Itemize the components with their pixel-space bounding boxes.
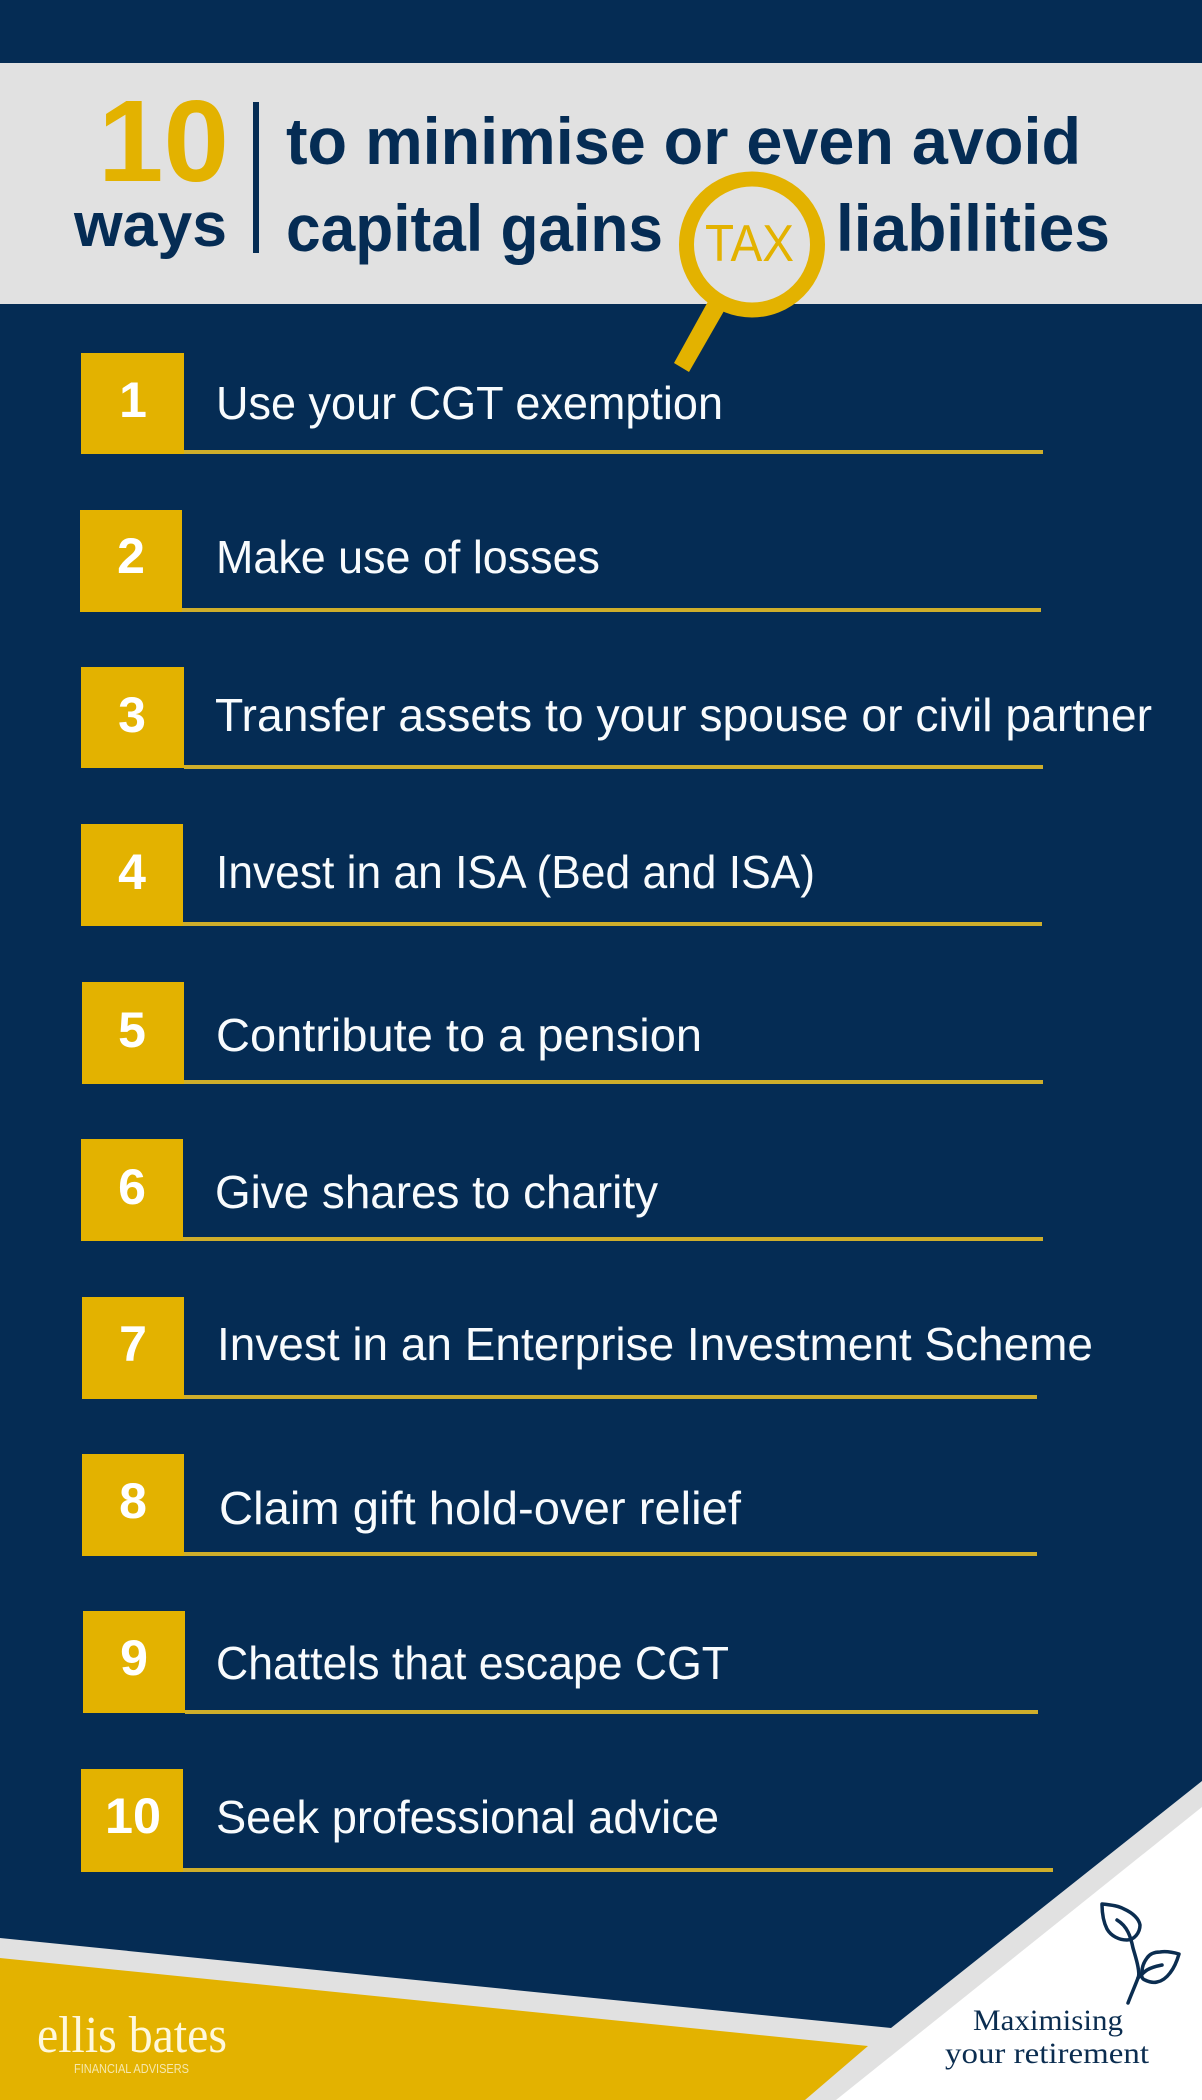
logo: ellis bates: FINANCIAL ADVISERS: [74, 2061, 189, 2076]
icon: magnifying glass over TAX: TAX: [705, 215, 794, 273]
item 1: [81, 353, 1043, 454]
item 7: Invest in an Enterprise Investment Scheme: [217, 1318, 1093, 1370]
icon: magnifying glass over TAX: [674, 179, 818, 372]
item 1: 1: [119, 372, 147, 428]
heading divider: [253, 102, 259, 253]
heading: ways: ways: [73, 191, 227, 260]
item 6: 6: [118, 1159, 146, 1215]
item 2: 2: [117, 528, 145, 584]
heading line two end: liabilities: [836, 191, 1110, 265]
tagline: your retirement: [945, 2037, 1150, 2070]
item 3: Transfer assets to your spouse or civil partner: [215, 689, 1152, 741]
item 8: 8: [119, 1473, 147, 1529]
item 4: 4: [118, 844, 146, 900]
item 9: Chattels that escape CGT: [216, 1637, 729, 1689]
header band: [0, 63, 1202, 304]
item 10: Seek professional advice: [216, 1791, 719, 1843]
item 9: 9: [120, 1630, 148, 1686]
footer shapes: [0, 1781, 1202, 2100]
heading line one: to minimise or even avoid: [286, 104, 1081, 178]
item 2: Make use of losses: [216, 531, 600, 583]
logo: ellis bates: ellis bates: [37, 2007, 227, 2064]
item 10: [81, 1769, 1053, 1872]
item 6: Give shares to charity: [215, 1166, 658, 1218]
item 8: [82, 1454, 1037, 1556]
item 7: [82, 1297, 1093, 1399]
item 5: [82, 982, 1043, 1084]
item 7: 7: [119, 1316, 147, 1372]
item 1: Use your CGT exemption: [216, 377, 723, 429]
item 6: [81, 1139, 1043, 1241]
item 8: Claim gift hold-over relief: [219, 1482, 741, 1534]
item 5: 5: [118, 1002, 146, 1058]
item 9: [83, 1611, 1038, 1714]
item 4: Invest in an ISA (Bed and ISA): [216, 846, 815, 898]
item 3: 3: [118, 687, 146, 743]
icon: plant sprig: [1102, 1904, 1179, 2003]
item 2: [80, 510, 1041, 612]
item 10: 10: [105, 1788, 161, 1844]
tagline: Maximising: [973, 2004, 1123, 2037]
item 4: [81, 824, 1042, 926]
heading line two: capital gains: [286, 191, 663, 265]
item 5: Contribute to a pension: [216, 1009, 702, 1061]
tagline: [945, 2004, 1150, 2070]
heading: 10: 10: [98, 76, 229, 206]
item 3: [81, 667, 1152, 769]
